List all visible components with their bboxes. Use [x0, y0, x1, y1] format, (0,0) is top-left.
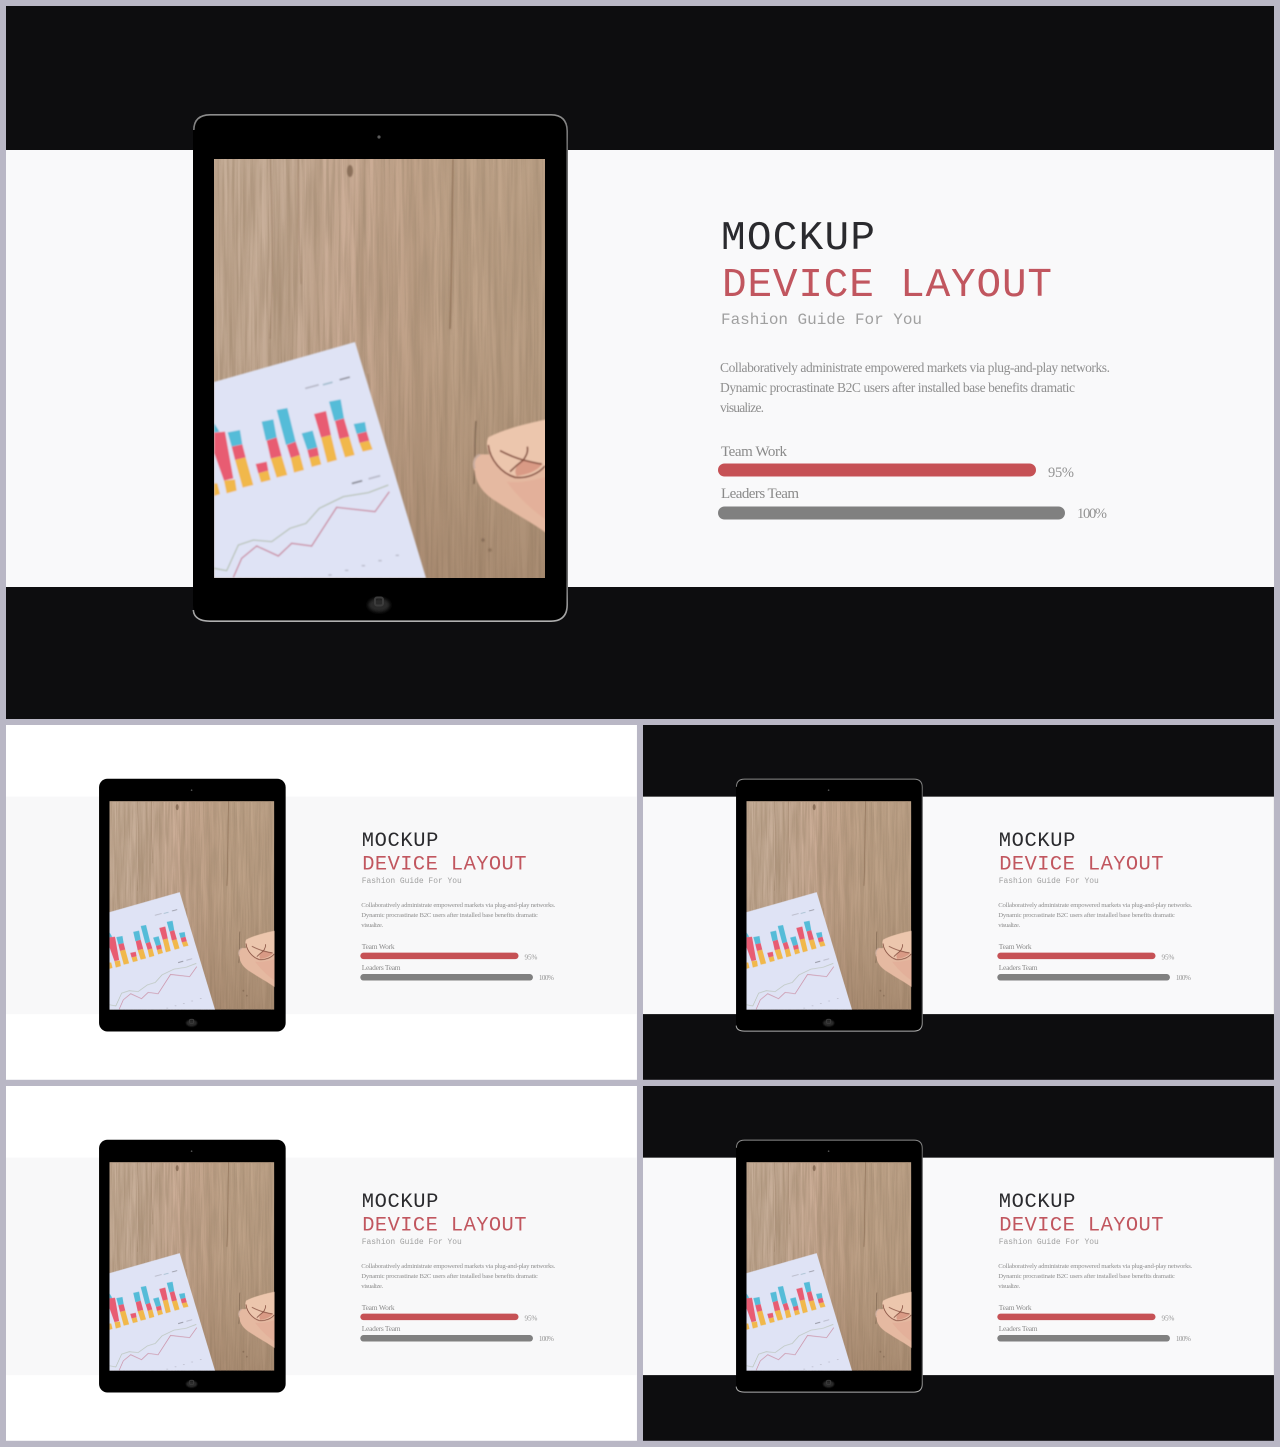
body text: Dynamic procrastinate B2C users after installed base benefits dramatic — [998, 912, 1175, 919]
progress: leaders team 100% — [360, 963, 554, 982]
panel: large dark slide — [6, 6, 1274, 719]
title: mockup: MOCKUP — [362, 830, 438, 853]
body text: visualize. — [998, 1283, 1020, 1290]
device: tablet with photo of charts — [99, 1140, 286, 1393]
body text: Dynamic procrastinate B2C users after installed base benefits dramatic — [361, 1273, 538, 1280]
progress: leaders team 100%: Leaders Team — [721, 486, 799, 502]
body text: Collaboratively administrate empowered markets via plug-and-play networks. — [998, 902, 1193, 909]
title: mockup: MOCKUP — [999, 830, 1075, 853]
body text: Collaboratively administrate empowered markets via plug-and-play networks. — [720, 360, 1110, 375]
panel: small light slide, bottom left — [6, 1086, 637, 1441]
subtitle: Fashion Guide For You — [362, 1238, 462, 1247]
progress: leaders team 100%: 100% — [539, 1335, 554, 1343]
progress: leaders team 100%: Leaders Team — [362, 1324, 401, 1333]
title: mockup: MOCKUP — [999, 1191, 1075, 1214]
progress: team work 95% — [360, 942, 537, 961]
slide background — [643, 725, 1274, 1080]
progress: leaders team 100%: Leaders Team — [999, 963, 1038, 972]
progress: team work 95%: Team Work — [999, 1303, 1032, 1312]
progress: leaders team 100%: 100% — [539, 974, 554, 982]
progress: leaders team 100% — [360, 1324, 554, 1343]
body text: Collaboratively administrate empowered markets via plug-and-play networks. — [361, 1263, 556, 1270]
progress: team work 95%: 95% — [1161, 953, 1174, 961]
body text — [998, 902, 1193, 929]
progress: team work 95%: 95% — [524, 953, 537, 961]
device: tablet with photo of charts — [193, 114, 568, 622]
slide background — [6, 1086, 637, 1441]
body text: Dynamic procrastinate B2C users after installed base benefits dramatic — [998, 1273, 1175, 1280]
progress: team work 95%: 95% — [1048, 465, 1074, 481]
title: mockup: MOCKUP — [362, 1191, 438, 1214]
progress: team work 95%: 95% — [524, 1314, 537, 1322]
progress: team work 95%: 95% — [1161, 1314, 1174, 1322]
progress: team work 95% — [718, 444, 1074, 481]
progress: leaders team 100%: 100% — [1077, 506, 1107, 522]
body text — [720, 360, 1110, 415]
body text: visualize. — [361, 922, 383, 929]
subtitle: Fashion Guide For You — [362, 877, 462, 886]
device: tablet with photo of charts — [736, 779, 923, 1032]
progress: leaders team 100% — [997, 963, 1191, 982]
body text — [998, 1263, 1193, 1290]
slide background — [6, 6, 1274, 719]
progress: team work 95%: Team Work — [362, 1303, 395, 1312]
subtitle: Fashion Guide For You — [999, 877, 1099, 886]
device: tablet with photo of charts — [99, 779, 286, 1032]
title: device layout: DEVICE LAYOUT — [999, 1214, 1163, 1237]
progress: team work 95% — [997, 942, 1174, 961]
title: mockup: MOCKUP — [721, 216, 875, 262]
progress: team work 95% — [360, 1303, 537, 1322]
progress: leaders team 100%: 100% — [1176, 1335, 1191, 1343]
progress: leaders team 100% — [718, 486, 1107, 522]
title: device layout: DEVICE LAYOUT — [362, 853, 526, 876]
body text: Collaboratively administrate empowered markets via plug-and-play networks. — [361, 902, 556, 909]
body text: Collaboratively administrate empowered markets via plug-and-play networks. — [998, 1263, 1193, 1270]
device: tablet with photo of charts — [736, 1140, 923, 1393]
body text — [361, 1263, 556, 1290]
title: device layout: DEVICE LAYOUT — [999, 853, 1163, 876]
progress: leaders team 100%: Leaders Team — [999, 1324, 1038, 1333]
progress: leaders team 100%: 100% — [1176, 974, 1191, 982]
progress: team work 95% — [997, 1303, 1174, 1322]
body text: visualize. — [361, 1283, 383, 1290]
body text: visualize. — [998, 922, 1020, 929]
panel: small dark slide, top right — [643, 725, 1274, 1080]
subtitle: Fashion Guide For You — [721, 311, 922, 329]
body text — [361, 902, 556, 929]
slide background — [643, 1086, 1274, 1441]
slide background — [6, 725, 637, 1080]
body text: Dynamic procrastinate B2C users after installed base benefits dramatic — [361, 912, 538, 919]
progress: leaders team 100% — [997, 1324, 1191, 1343]
subtitle: Fashion Guide For You — [999, 1238, 1099, 1247]
panel: small light slide, top left — [6, 725, 637, 1080]
progress: team work 95%: Team Work — [721, 444, 788, 460]
progress: team work 95%: Team Work — [999, 942, 1032, 951]
title: device layout: DEVICE LAYOUT — [722, 263, 1052, 309]
body text: Dynamic procrastinate B2C users after installed base benefits dramatic — [720, 380, 1075, 395]
progress: team work 95%: Team Work — [362, 942, 395, 951]
panel: small dark slide, bottom right — [643, 1086, 1274, 1441]
title: device layout: DEVICE LAYOUT — [362, 1214, 526, 1237]
body text: visualize. — [720, 400, 764, 415]
progress: leaders team 100%: Leaders Team — [362, 963, 401, 972]
